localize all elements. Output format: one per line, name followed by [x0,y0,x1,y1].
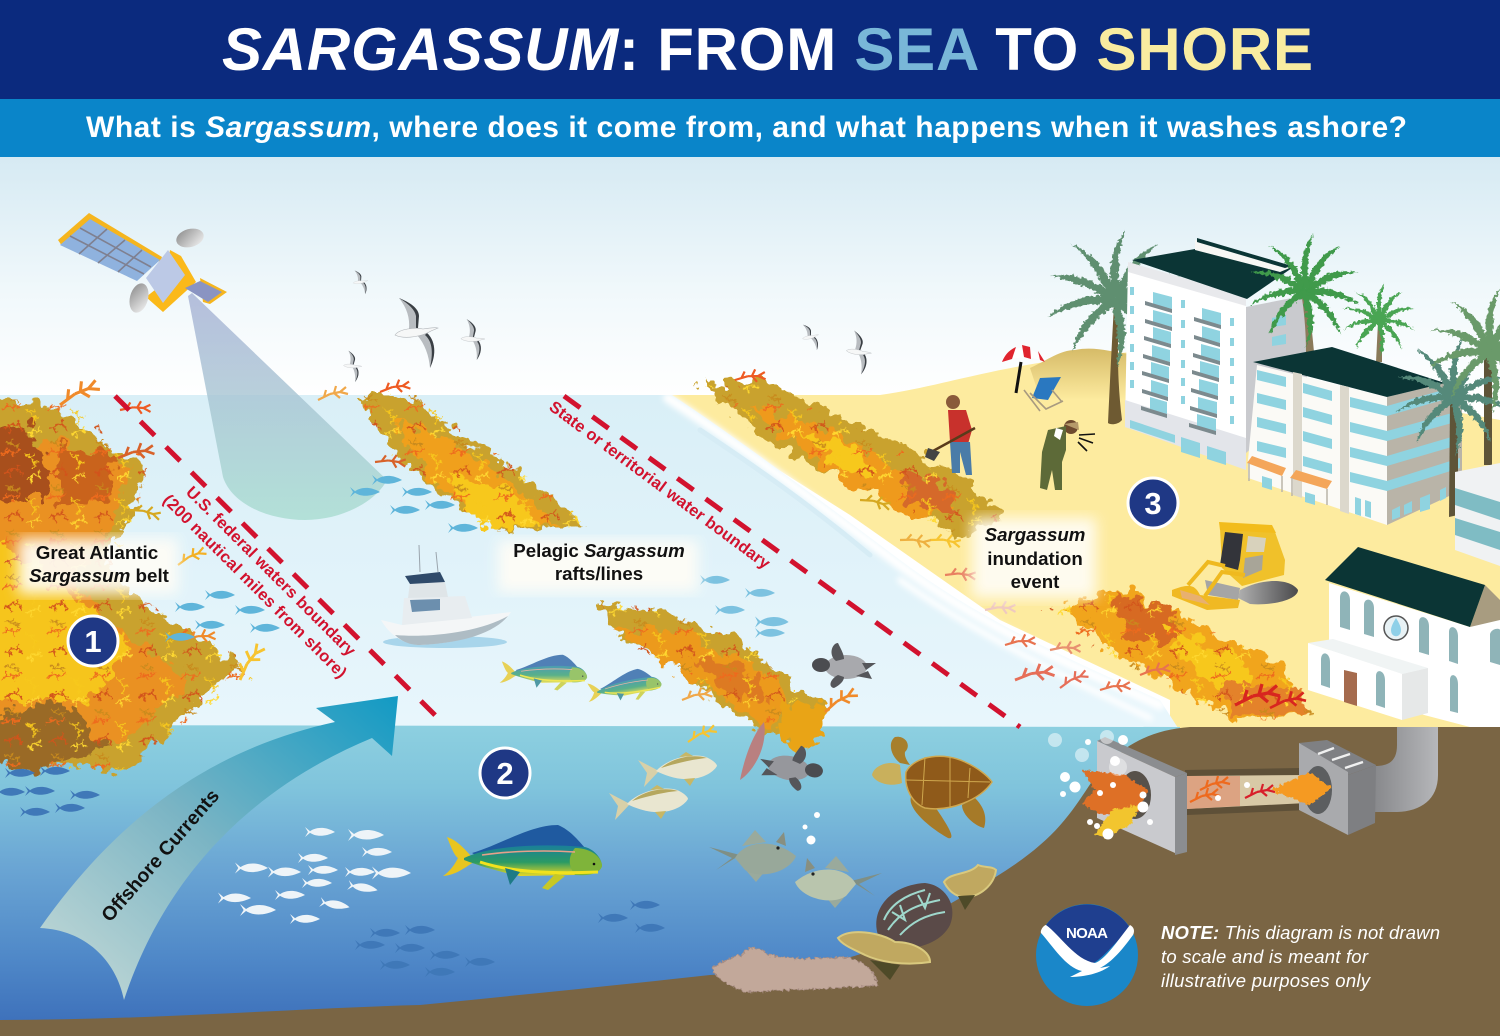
label: Pelagic rafts: rafts/lines [555,563,643,584]
sand dune [1030,349,1130,400]
label: Pelagic rafts: Pelagic Sargassum [513,540,685,561]
label: Great Atlantic Sargassum belt: Great Atlantic [36,542,158,563]
bubbles [1048,730,1250,840]
underwater [0,725,1180,1036]
fish school: under beam [350,475,478,533]
label: inundation event [972,518,1096,598]
satellite [58,213,227,315]
palm tree 3 [1342,283,1416,362]
sea surface [0,395,1178,728]
satellite beam [188,293,387,520]
label: Great Atlantic Sargassum belt [18,538,178,594]
water treatment building [1308,547,1500,727]
note text [1161,922,1440,991]
person coughing [1040,420,1095,490]
seabirds [341,270,876,383]
coral reef [712,865,996,992]
dark fish silhouettes [0,766,665,977]
jack fish [609,752,717,820]
shoreline foam [668,398,1160,718]
state boundary line [564,396,1020,727]
large mahi fish [443,825,602,890]
number badge 1: 1 [84,624,102,659]
number badge 1 [68,616,118,666]
small mahi fish [500,655,663,708]
seafloor [0,727,1500,1036]
sargassum: central raft upper [318,378,590,532]
note text: to scale and is meant for [1161,946,1369,967]
person shoveling [925,395,975,475]
number badge 2 [480,748,530,798]
federal boundary line [115,396,445,725]
federal boundary text: (200 nautical miles from shore) [159,491,350,682]
note text: illustrative purposes only [1161,970,1372,991]
fish school: upper left [165,590,280,642]
subtitle band [0,99,1500,157]
federal boundary text: U.S. federal waters boundary [182,483,360,660]
note text: NOTE: This diagram is not drawn [1161,922,1440,943]
green sea turtle [872,737,992,838]
sargassum: central raft lower [600,600,860,755]
number badge 3 [1128,478,1178,528]
header band [0,0,1500,99]
sargassum: Great Atlantic belt [0,378,270,770]
label: Pelagic rafts [498,540,698,592]
gray sea turtles [756,643,876,795]
number badge 2: 2 [496,756,514,791]
label: inundation event: inundation [987,548,1083,569]
label: inundation event: Sargassum [985,524,1085,545]
label: Great Atlantic Sargassum belt: Sargassum belt [29,565,170,586]
sargassum entering intake [1082,770,1148,838]
palm trees right [1394,287,1500,517]
title: SARGASSUM: FROM SEA TO SHORE [222,16,1313,83]
boat [381,545,511,648]
palm tree 2 [1248,233,1362,352]
NOAA logo [1036,904,1138,1006]
beach umbrella and chair [1002,345,1063,411]
NOAA logo: NOAA [1066,925,1108,942]
offshore currents arrow [40,696,398,1000]
offshore currents arrow: Offshore Currents [97,785,224,926]
intake pipe system [1097,727,1438,855]
apartment building [1247,347,1462,525]
palm tree 1 [1046,229,1184,424]
number badge 3: 3 [1144,486,1162,521]
sargassum: shore lower [1005,590,1315,722]
sand beach [660,352,1500,740]
fish school: near raft right [700,575,789,638]
sargassum blade [740,722,765,780]
hotel building [1125,238,1307,470]
label: inundation event: event [1011,571,1059,592]
right edge building [1455,463,1500,566]
triggerfish [709,812,882,908]
white fish school [218,827,411,924]
sargassum: shore upper [700,366,1018,618]
subtitle: What is Sargassum, where does it come from, and what happens when it washes ashore? [86,111,1407,144]
state boundary text: State or territorial water boundary [546,398,774,573]
background: sky [0,157,1500,397]
bulldozer [1172,522,1298,610]
